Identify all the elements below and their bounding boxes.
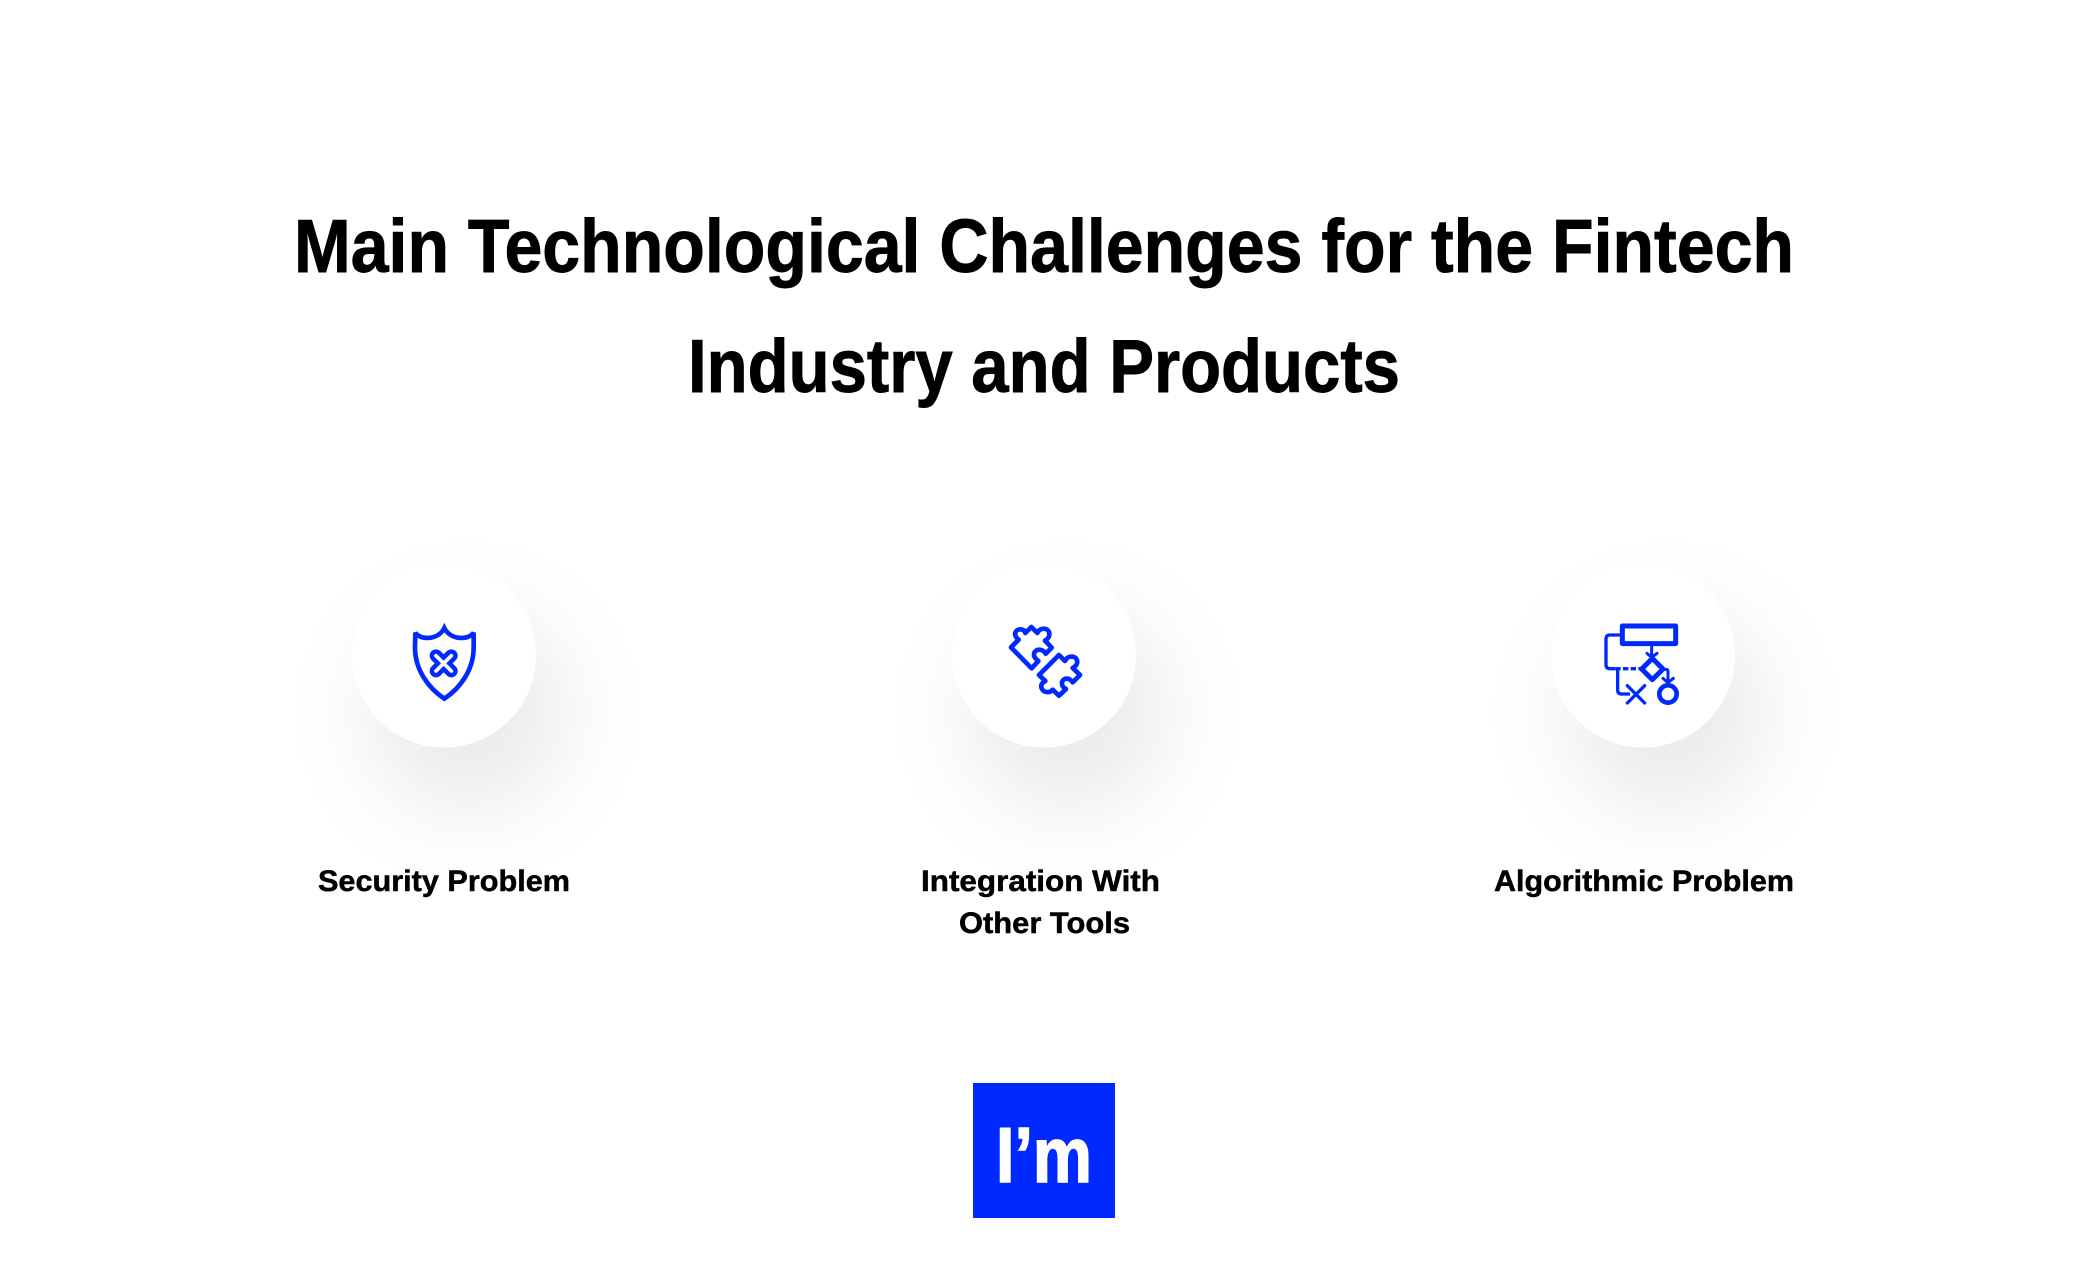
title: Industry and Products xyxy=(688,324,1400,408)
label: integration with other tools: Integration With xyxy=(921,865,1160,898)
label: integration with other tools: Other Tools xyxy=(959,907,1130,940)
panel: algorithmic problem xyxy=(1494,564,1794,898)
title: Main Technological Challenges for the Fintech xyxy=(294,204,1794,288)
icon circle: algorithmic xyxy=(1551,564,1767,812)
icon circle: integration xyxy=(952,564,1168,812)
icon circle: security xyxy=(352,564,568,812)
label: algorithmic problem: Algorithmic Problem xyxy=(1494,865,1794,898)
panel: integration with other tools xyxy=(921,564,1168,940)
icon: flowchart xyxy=(1606,626,1677,703)
logo xyxy=(973,1083,1115,1218)
panel: security problem xyxy=(318,564,570,898)
logo: I’m xyxy=(996,1111,1092,1199)
title xyxy=(294,204,1794,408)
label: security problem: Security Problem xyxy=(318,865,570,898)
icon: shield with cross xyxy=(415,628,474,699)
icon: puzzle pieces xyxy=(1011,627,1080,696)
label: integration with other tools xyxy=(921,865,1160,940)
